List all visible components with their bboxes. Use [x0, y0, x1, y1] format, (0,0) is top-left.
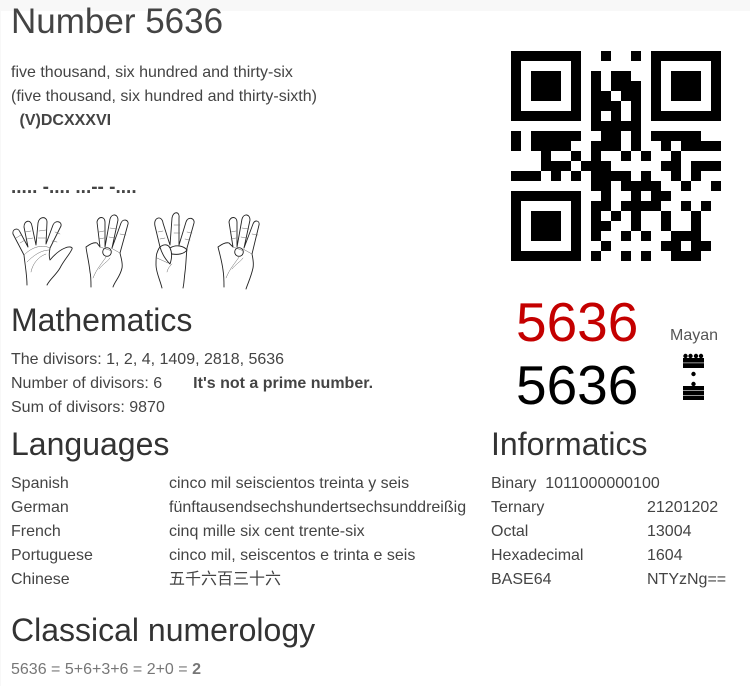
text: Morse code: ..... -.... ...-- -.... [11, 177, 137, 198]
icon: hand, three [155, 213, 194, 288]
table: language names: Spanish [11, 475, 69, 492]
table: language names: German [11, 499, 69, 516]
table: base values: 21201202 [647, 499, 718, 516]
icon: open hand, five [13, 218, 72, 285]
table: number in each language: fünftausendsechshundertsechsunddreißig [169, 499, 466, 516]
table: base names: Octal [491, 523, 528, 540]
number in red: 5636 [516, 291, 638, 353]
text block: number in words and Roman numeral: five thousand, six hundred and thirty-six [11, 64, 293, 81]
table: number in each language: cinco mil seiscientos treinta y seis [169, 475, 409, 492]
table: base values: 1604 [647, 547, 683, 564]
heading: Classical numerology: Classical numerology [11, 612, 315, 648]
table: language names: Chinese [11, 571, 70, 588]
icon: hand, six [86, 215, 128, 287]
table: language names [11, 475, 93, 588]
table: number in each language: 五千六百三十六 [169, 571, 281, 588]
icon: hand, four-finger sign [218, 215, 259, 289]
number in black: 5636 [516, 354, 638, 416]
text block: divisors: Number of divisors: 6 It's not a prime number. [11, 375, 373, 392]
table: base values: NTYzNg== [647, 571, 726, 588]
heading: Languages: Languages [11, 426, 169, 462]
table: base names [491, 475, 660, 588]
table: language names: French [11, 523, 61, 540]
text block: divisors [11, 351, 373, 416]
table: number in each language: cinq mille six cent trente-six [169, 523, 365, 540]
table: base values: 13004 [647, 523, 692, 540]
text block: number in words and Roman numeral: (V)DCXXXVI [20, 112, 111, 129]
QR code [511, 51, 721, 261]
text: numerology sum: 5636 = 5+6+3+6 = 2+0 = 2 [11, 661, 201, 678]
icon: sign language hands [12, 212, 260, 290]
table: language names: Portuguese [11, 547, 93, 564]
icon: Mayan numeral [683, 354, 704, 400]
heading: Mathematics: Mathematics [11, 302, 192, 338]
table: base names: BASE64 [491, 571, 551, 588]
table: base names: Binary 1011000000100 [491, 475, 660, 492]
text block: divisors: The divisors: 1, 2, 4, 1409, 2818, 5636 [11, 351, 284, 368]
table: base values [647, 499, 726, 588]
heading: Informatics: Informatics [491, 426, 647, 462]
table: base names: Hexadecimal [491, 547, 583, 564]
label: Mayan: Mayan [670, 327, 718, 344]
text block: number in words and Roman numeral: (five thousand, six hundred and thirty-sixth) [11, 88, 317, 105]
text block: divisors: Sum of divisors: 9870 [11, 399, 165, 416]
text block: number in words and Roman numeral [11, 64, 317, 129]
title: Number 5636 [11, 2, 223, 41]
table: number in each language [169, 475, 466, 588]
table: number in each language: cinco mil, seiscentos e trinta e seis [169, 547, 415, 564]
table: base names: Ternary [491, 499, 544, 516]
